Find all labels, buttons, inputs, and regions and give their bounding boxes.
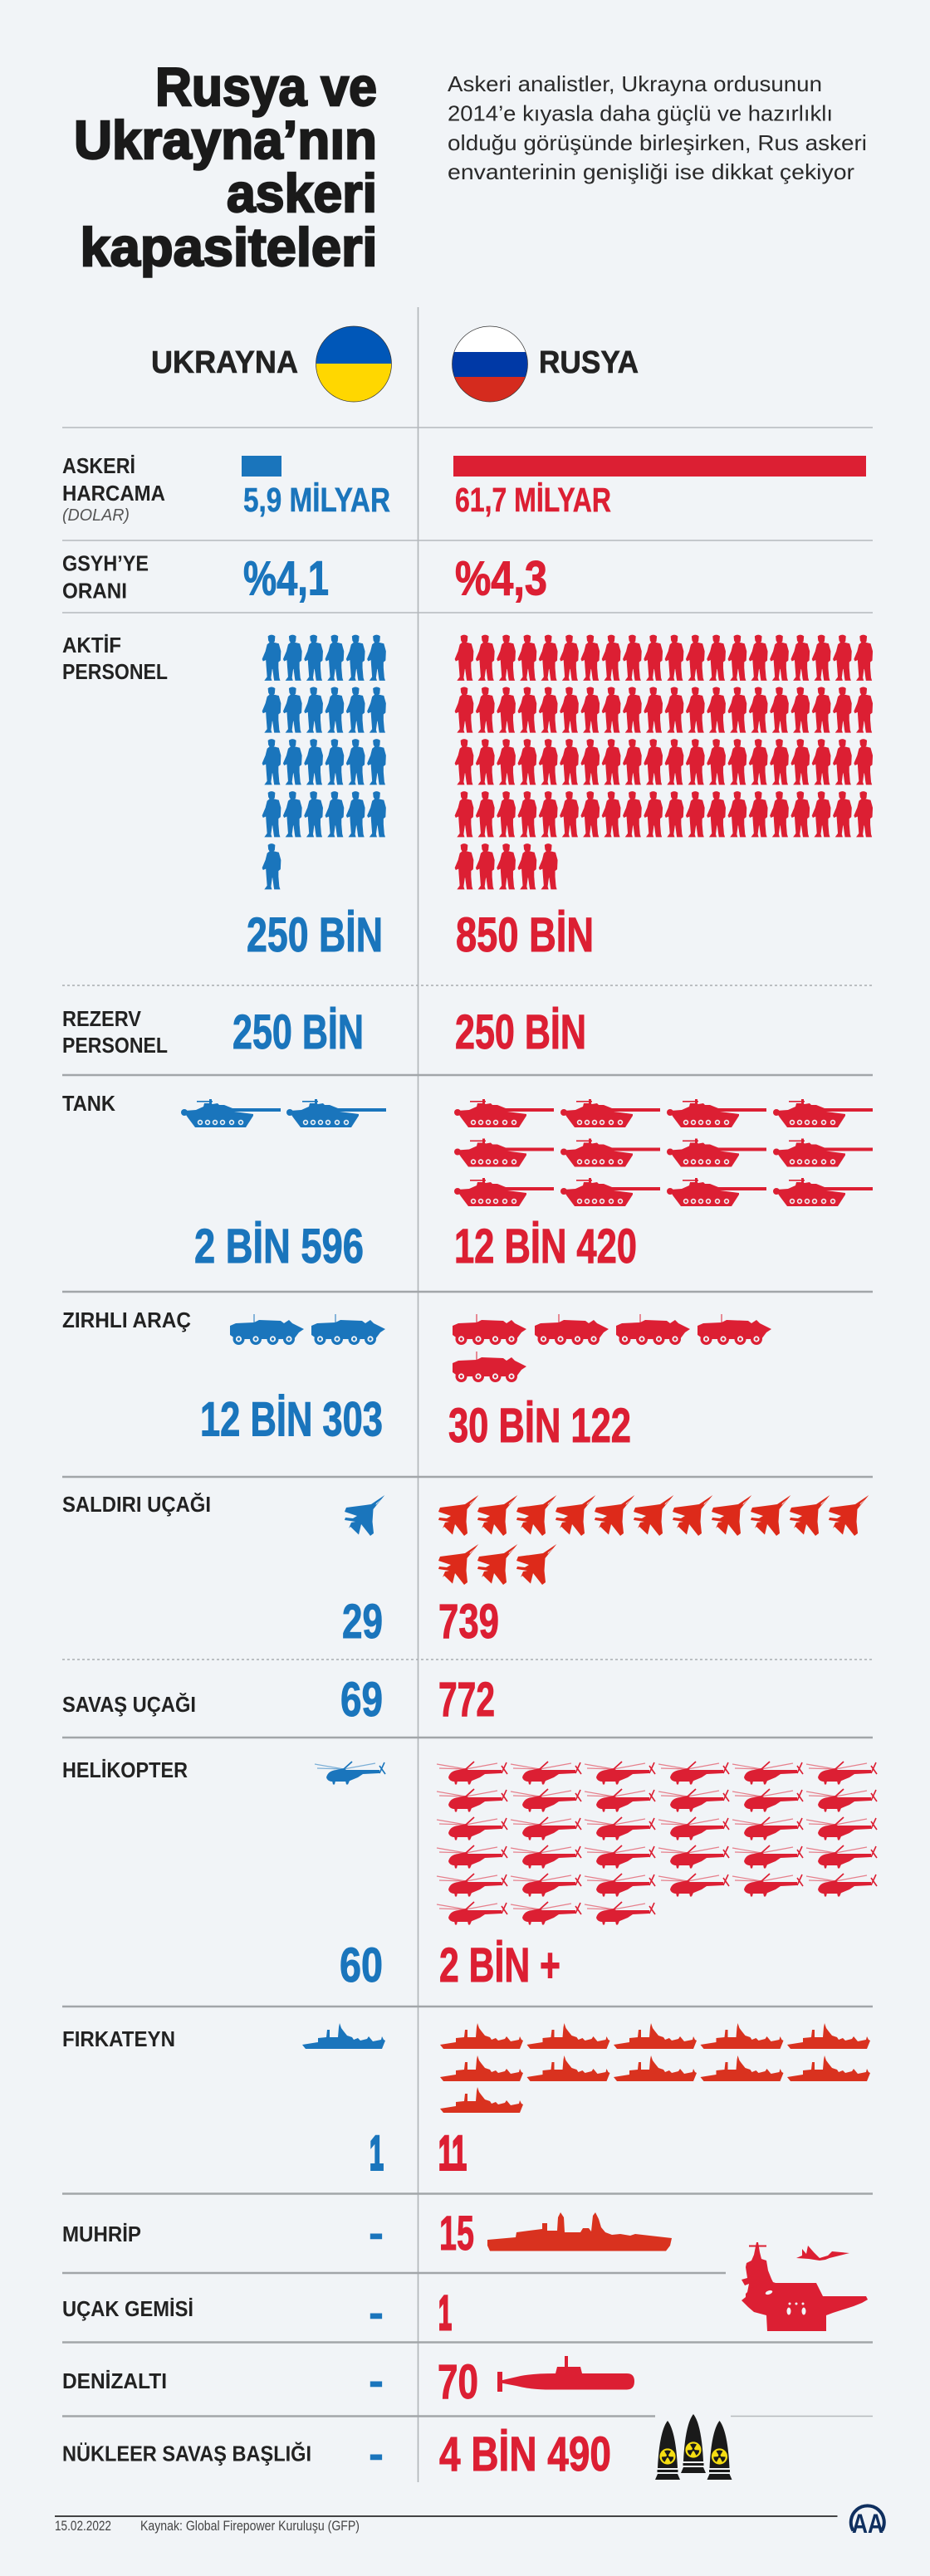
value: Ukraine warheads: -: [369, 2431, 384, 2479]
value: Russia frigates: 11: [438, 2127, 467, 2180]
title: [74, 56, 377, 277]
icon: AA logo: AA: [852, 2509, 884, 2539]
panel: armored vehicles: [62, 1308, 771, 1453]
label: active personnel: AKTİF: [62, 633, 121, 657]
value: Ukraine tanks: 2 BİN 596: [194, 1220, 364, 1273]
pictogram: Russia helicopters: [437, 1762, 877, 1924]
label: tank: TANK: [62, 1091, 115, 1116]
pictogram: Russia frigates: [440, 2023, 870, 2113]
title: kapasiteleri: [80, 217, 377, 277]
intro text: 2014’e kıyasla daha güçlü ve hazırlıklı: [448, 101, 833, 126]
value: Ukraine GDP share: %4,1: [243, 551, 329, 606]
icon: warheads: [655, 2414, 732, 2480]
pictogram: Russia jets: [438, 1495, 869, 1585]
bar: Russia spending: [453, 456, 866, 477]
value: Ukraine destroyers: -: [369, 2210, 384, 2258]
label: attack aircraft: SALDIRI UÇAĞI: [62, 1492, 211, 1517]
intro text: Askeri analistler, Ukrayna ordusunun: [448, 71, 822, 96]
label: destroyers: MUHRİP: [62, 2222, 141, 2246]
panel: aircraft carrier: 1: [438, 2286, 452, 2340]
value: Russia helicopters: 2 BİN +: [439, 1938, 560, 1992]
label: reserve personnel: [62, 1006, 168, 1058]
pictogram: Russia vehicles: [453, 1314, 771, 1382]
intro text: [448, 71, 867, 184]
title: Ukrayna’nın: [74, 110, 377, 170]
label: active personnel: PERSONEL: [62, 659, 168, 684]
label: armored vehicles: ZIRHLI ARAÇ: [62, 1308, 191, 1332]
panel: helicopters: [62, 1757, 877, 1992]
value: Ukraine attack aircraft: 29: [342, 1595, 383, 1649]
pictogram: Ukraine tanks: [181, 1099, 386, 1127]
intro text: olduğu görüşünde birleşirken, Rus askeri: [448, 130, 867, 155]
label: spending: ASKERİ: [62, 453, 135, 478]
value: Russia attack aircraft: 739: [438, 1595, 499, 1649]
date: 15.02.2022: [55, 2518, 111, 2534]
value: Ukraine helicopters: 60: [340, 1938, 383, 1992]
value: Russia active: 850 BİN: [456, 908, 594, 962]
panel: attack aircraft: [62, 1492, 869, 1649]
label: active personnel: [62, 633, 168, 684]
panel: destroyers: [62, 2207, 672, 2261]
value: Russia spending: 61,7 MİLYAR: [455, 481, 611, 519]
label: helicopters: HELİKOPTER: [62, 1757, 188, 1782]
header: Rusya: RUSYA: [539, 345, 639, 380]
source: Kaynak: Global Firepower Kuruluşu (GFP): [140, 2518, 360, 2534]
label: GDP share: ORANI: [62, 578, 127, 603]
header: Rusya: [452, 325, 639, 403]
panel: fighter aircraft: [62, 1673, 495, 1727]
value: Russia GDP share: %4,3: [455, 551, 547, 606]
icon: destroyer: [487, 2212, 672, 2251]
intro text: envanterinin genişliği ise dikkat çekiyor: [448, 159, 854, 184]
panel: aircraft carrier: [62, 2242, 868, 2340]
panel: reserve personnel: [62, 1005, 586, 1059]
icon: aircraft carrier: [742, 2242, 868, 2331]
pictogram: Ukraine helicopter: [315, 1762, 385, 1785]
value: Russia vehicles: 30 BİN 122: [448, 1399, 631, 1453]
header: Ukrayna: [151, 325, 392, 403]
value: Russia submarines: 70: [438, 2355, 478, 2409]
value: Ukraine spending: 5,9 MİLYAR: [243, 481, 390, 519]
label: spending: HARCAMA: [62, 481, 165, 506]
title: askeri: [227, 163, 377, 223]
label: spending: (DOLAR): [62, 506, 130, 525]
panel: GDP share: [62, 551, 547, 606]
label: GDP share: [62, 551, 149, 603]
panel: active personnel: [62, 633, 873, 962]
pictogram: Ukraine vehicles: [230, 1314, 385, 1345]
label: reserve personnel: REZERV: [62, 1006, 142, 1031]
value: Ukraine vehicles: 12 BİN 303: [200, 1393, 383, 1446]
panel: military spending: [62, 453, 866, 525]
value: Ukraine submarines: -: [369, 2358, 384, 2406]
icon: submarine: [497, 2356, 634, 2392]
panel: nuclear warheads: [62, 2414, 732, 2481]
footer: [55, 2516, 837, 2534]
title: Rusya ve: [155, 56, 377, 117]
label: nuclear warheads: NÜKLEER SAVAŞ BAŞLIĞI: [62, 2441, 311, 2466]
pictogram: Ukraine jet: [345, 1495, 384, 1536]
panel: submarines: [62, 2355, 634, 2409]
label: spending: [62, 453, 165, 525]
panel: tanks: [62, 1091, 873, 1273]
header: Ukrayna: UKRAYNA: [151, 345, 298, 380]
value: Russia warheads: 4 BİN 490: [439, 2427, 611, 2481]
label: reserve personnel: PERSONEL: [62, 1033, 168, 1058]
bar: Ukraine spending: [242, 456, 281, 477]
value: Ukraine reserve: 250 BİN: [232, 1005, 364, 1059]
pictogram: Russia tanks: [454, 1099, 873, 1206]
value: Ukraine fighters: 69: [340, 1673, 383, 1727]
value: Ukraine active: 250 BİN: [247, 908, 383, 962]
value: Russia destroyers: 15: [439, 2207, 474, 2261]
value: Russia reserve: 250 BİN: [455, 1005, 586, 1059]
pictogram: Ukraine frigate: [302, 2023, 385, 2049]
value: Russia fighters: 772: [438, 1673, 495, 1727]
value: Ukraine carriers: -: [369, 2290, 384, 2338]
panel: frigates: [62, 2023, 870, 2180]
label: GDP share: GSYH’YE: [62, 551, 149, 576]
value: Ukraine frigates: 1: [370, 2127, 384, 2180]
icon: Ukrainian flag: [316, 325, 392, 403]
value: Russia tanks: 12 BİN 420: [454, 1220, 637, 1273]
label: frigates: FIRKATEYN: [62, 2026, 175, 2051]
pictogram: Russia soldiers: [455, 635, 873, 889]
pictogram: Ukraine soldiers: [262, 635, 385, 889]
label: aircraft carrier: UÇAK GEMİSİ: [62, 2296, 193, 2321]
label: submarines: DENİZALTI: [62, 2368, 167, 2393]
icon: Russian flag: [452, 325, 528, 403]
label: fighter aircraft: SAVAŞ UÇAĞI: [62, 1692, 196, 1717]
